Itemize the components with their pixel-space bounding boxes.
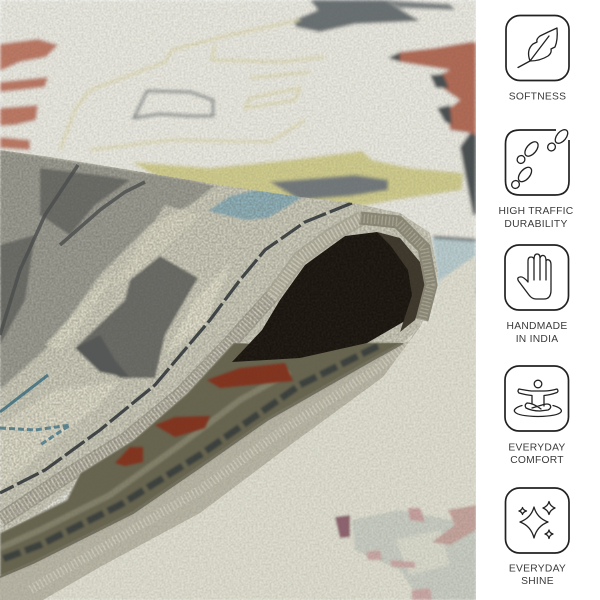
blue thin lines	[0, 375, 48, 412]
icon: hand	[505, 245, 568, 310]
feature: everyday comfort	[505, 366, 568, 466]
rope lip	[0, 296, 272, 520]
feature: softness	[506, 16, 569, 102]
underside of rug	[0, 341, 406, 578]
label: everyday comfort: EVERYDAY	[508, 442, 566, 454]
dark border stripe	[0, 203, 352, 493]
feature: handmade in india	[505, 245, 568, 345]
roll top surface	[0, 150, 438, 533]
label: everyday shine	[509, 564, 566, 587]
dark hollow under roll	[232, 232, 426, 362]
inner shadow of hollow	[377, 232, 426, 332]
label: handmade in india	[507, 321, 567, 345]
terracotta motifs left	[0, 39, 58, 150]
yellow band	[132, 151, 463, 210]
blue patch	[208, 188, 305, 220]
lower rolled edge strip	[0, 300, 433, 600]
grey motif under band	[270, 175, 388, 200]
sidebar white panel	[476, 0, 600, 600]
dark grey stripes	[0, 168, 130, 345]
charcoal motif top	[294, 0, 420, 32]
label: softness: SOFTNESS	[509, 92, 566, 102]
label: handmade in india: IN INDIA	[516, 334, 558, 345]
pale blue patch right	[432, 236, 476, 300]
feature: high traffic durability	[499, 127, 574, 230]
rug floor bottom	[30, 255, 476, 600]
rug floor background	[0, 0, 476, 534]
large grey patch	[75, 256, 198, 378]
label: high traffic durability	[499, 206, 574, 230]
rolled rim around hollow	[272, 218, 431, 320]
faded medallion bottom right	[352, 510, 476, 600]
noise texture overlay	[0, 0, 476, 600]
photo: rolled rug corner	[0, 0, 476, 600]
icon: sparkles	[506, 488, 569, 553]
label: everyday shine: EVERYDAY	[509, 564, 566, 574]
cream highlights	[114, 204, 196, 286]
label: high traffic durability: HIGH TRAFFIC	[499, 206, 574, 217]
yellow vine outlines	[60, 20, 325, 150]
label: everyday shine: SHINE	[521, 576, 554, 587]
icon: meditating figure	[505, 366, 568, 431]
red reverse pattern spots	[115, 363, 293, 466]
label: handmade in india: HANDMADE	[507, 321, 567, 332]
terracotta stepped border right	[400, 42, 476, 135]
icon: feather	[506, 16, 569, 80]
icon: footprints	[506, 127, 570, 195]
grey small outline motif	[134, 91, 213, 118]
label: everyday comfort	[508, 442, 566, 466]
grain on roll surface	[0, 150, 438, 533]
label: everyday comfort: COMFORT	[510, 455, 564, 466]
label: high traffic durability: DURABILITY	[504, 219, 568, 230]
feature: everyday shine	[506, 488, 569, 587]
grey left section	[0, 150, 215, 390]
